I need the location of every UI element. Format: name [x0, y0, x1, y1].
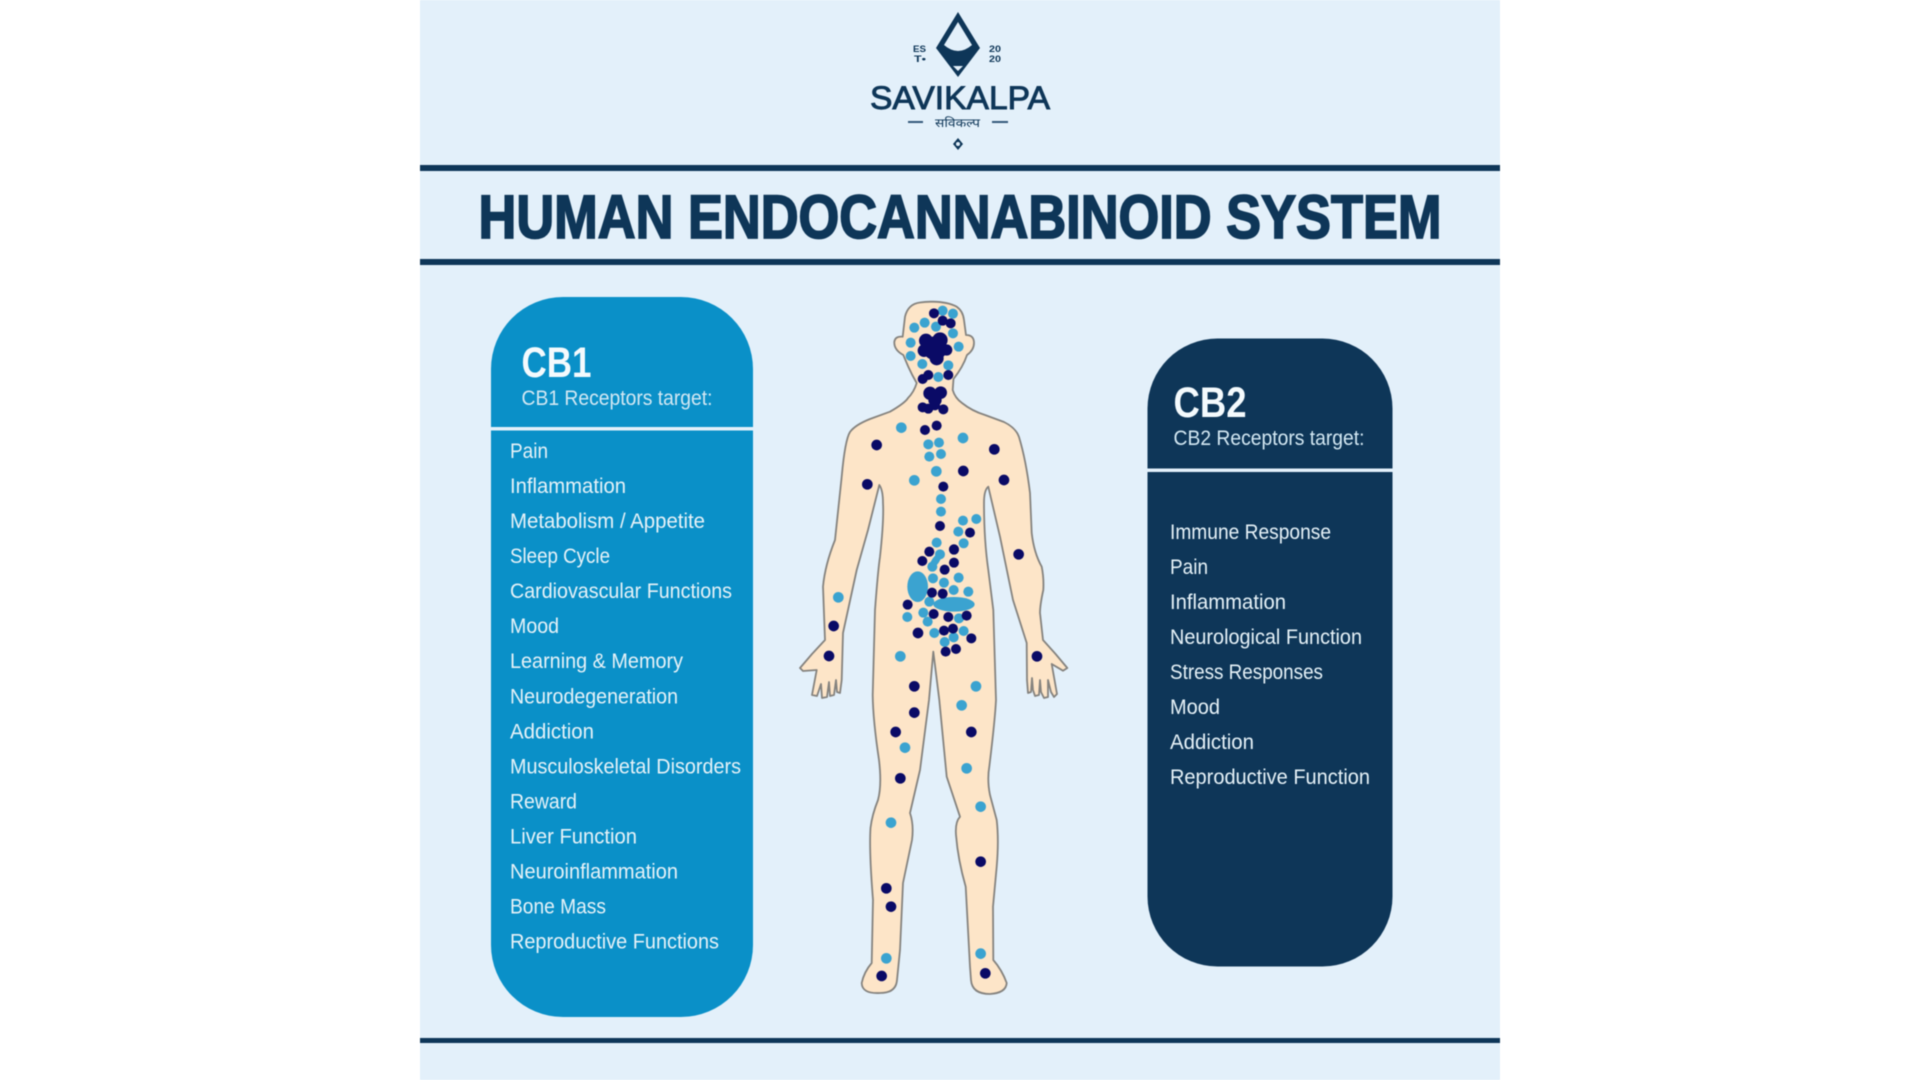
logo: Savikalpa: SAVIKALPA: [870, 80, 1051, 116]
list: CB1 targets: Cardiovascular Functions: [510, 580, 732, 603]
list: CB1 targets: Learning & Memory: [510, 650, 683, 673]
list: CB2 targets: [1170, 521, 1370, 789]
list: CB2 targets: Stress Responses: [1170, 661, 1323, 684]
heading: CB1: CB1: [522, 339, 592, 387]
dark receptor dots: abdomen and arms: [824, 545, 1042, 718]
panel: CB1: [491, 297, 753, 1017]
light receptor dots: abdomen and organs: [833, 549, 981, 711]
background panel: [420, 0, 1500, 1080]
dark receptor dots: legs: [876, 727, 991, 981]
panel: CB2: [1148, 338, 1392, 966]
subheading: CB2: CB2 Receptors target:: [1174, 427, 1364, 450]
list: CB1 targets: Sleep Cycle: [510, 545, 610, 568]
subheading: CB1: CB1 Receptors target:: [522, 387, 712, 410]
list: CB2 targets: Pain: [1170, 556, 1208, 579]
list: CB1 targets: [510, 440, 741, 954]
body outline: [800, 302, 1067, 994]
logo: Savikalpa: सविकल्प: [935, 116, 980, 130]
list: CB1 targets: Neurodegeneration: [510, 686, 678, 708]
logo: Savikalpa: [870, 12, 1051, 150]
middle rule: [420, 259, 1500, 265]
title: HUMAN ENDOCANNABINOID SYSTEM: [478, 183, 1442, 251]
list: CB2 targets: Mood: [1170, 696, 1220, 719]
list: CB1 targets: Reproductive Functions: [510, 930, 719, 954]
list: CB2 targets: Neurological Function: [1170, 626, 1362, 649]
list: CB2 targets: Addiction: [1170, 731, 1254, 754]
list: CB1 targets: Inflammation: [510, 475, 626, 498]
logo: Savikalpa: ES: [913, 44, 926, 54]
list: CB1 targets: Metabolism / Appetite: [510, 510, 705, 533]
top rule: [420, 165, 1500, 171]
light receptor dots: legs: [881, 742, 986, 964]
logo: Savikalpa: T•: [914, 54, 926, 64]
list: CB1 targets: Bone Mass: [510, 896, 606, 918]
list: CB1 targets: Pain: [510, 440, 548, 463]
list: CB1 targets: Musculoskeletal Disorders: [510, 756, 741, 778]
logo: Savikalpa: 20: [989, 54, 1001, 64]
list: CB1 targets: Neuroinflammation: [510, 860, 678, 884]
list: CB2 targets: Reproductive Function: [1170, 766, 1370, 789]
list: CB2 targets: Inflammation: [1170, 591, 1286, 614]
list: CB1 targets: Mood: [510, 615, 559, 638]
list: CB1 targets: Reward: [510, 790, 577, 814]
light receptor dots: upper body: [896, 306, 981, 548]
heading: CB2: CB2: [1174, 379, 1246, 427]
list: CB1 targets: Addiction: [510, 720, 594, 744]
dark receptor dots: upper body: [862, 308, 1024, 560]
bottom rule: [420, 1038, 1500, 1043]
logo: Savikalpa: 20: [989, 44, 1001, 54]
list: CB1 targets: Liver Function: [510, 826, 637, 848]
human body diagram: [800, 302, 1067, 994]
list: CB2 targets: Immune Response: [1170, 521, 1331, 544]
